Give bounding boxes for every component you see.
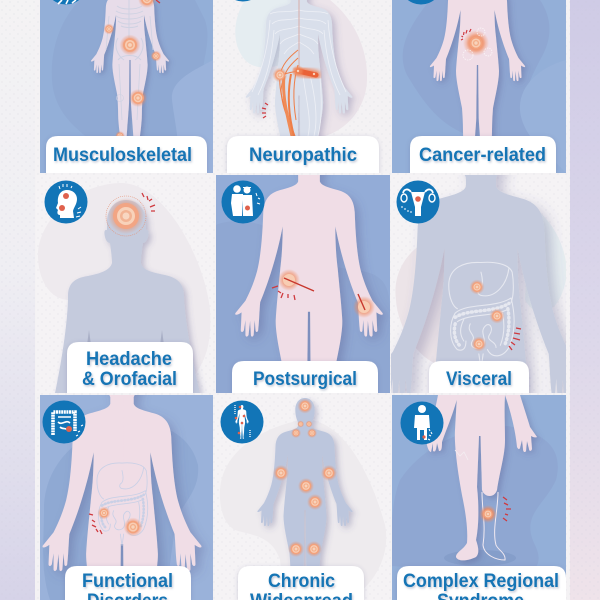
pain points <box>470 280 521 352</box>
icon: uterus <box>396 180 440 224</box>
body <box>235 175 386 361</box>
body with organs <box>42 395 205 575</box>
icon: neuropathic <box>235 0 251 2</box>
pain points <box>89 506 142 536</box>
icon: musculoskeletal <box>53 0 79 4</box>
panel: musculoskeletal <box>40 0 213 173</box>
label: Functional Disorders: Functional <box>82 571 173 592</box>
panel: headache and orofacial <box>44 180 204 393</box>
body with organs <box>391 175 566 393</box>
body with amputated leg <box>426 395 537 560</box>
label: Headache & Orofacial: & Orofacial <box>82 369 177 390</box>
icon: couple <box>222 180 264 224</box>
icon: intestine <box>42 400 86 444</box>
label: Chronic Widespread <box>238 566 364 600</box>
icon: person with leg pain <box>400 402 444 444</box>
icon: cancer-related <box>408 0 434 4</box>
body <box>258 398 356 566</box>
label: Postsurgical: Postsurgical <box>253 369 357 390</box>
panel: postsurgical <box>216 175 390 393</box>
body <box>430 0 527 136</box>
label: Musculoskeletal <box>46 136 207 173</box>
panel: chronic widespread <box>220 398 368 600</box>
label: Chronic Widespread: Chronic <box>268 571 335 592</box>
panel: cancer-related <box>392 0 566 186</box>
label: Visceral <box>429 361 529 393</box>
label: Complex Regional Syndrome: Complex Regional <box>403 571 559 592</box>
label: Headache & Orofacial <box>67 342 193 393</box>
label: Complex Regional Syndrome <box>397 566 566 600</box>
label: Functional Disorders <box>65 566 191 600</box>
pain points <box>273 398 337 557</box>
body with skeleton <box>91 0 170 136</box>
pain point <box>455 450 511 523</box>
panel: neuropathic <box>226 0 380 173</box>
label: Neuropathic: Neuropathic <box>249 145 357 166</box>
pain points <box>104 0 162 141</box>
body with nerves <box>246 0 356 136</box>
phantom leg outline <box>482 492 505 560</box>
panel: complex regional syndrome <box>391 395 566 600</box>
tumour and cells <box>461 28 492 60</box>
panel: visceral <box>391 175 566 393</box>
label: Postsurgical <box>232 361 378 393</box>
icon: head <box>44 180 88 224</box>
panel: functional disorders <box>40 395 213 600</box>
label: Musculoskeletal: Musculoskeletal <box>53 145 192 166</box>
label: Headache & Orofacial: Headache <box>86 349 172 370</box>
headache pain <box>106 193 155 236</box>
label: Visceral: Visceral <box>446 369 512 390</box>
head and shoulders <box>55 200 200 393</box>
nerves in pain <box>262 50 316 136</box>
surgical pain points <box>272 269 375 318</box>
icon: person <box>220 400 264 444</box>
label: Neuropathic <box>227 136 379 173</box>
label: Cancer-related: Cancer-related <box>419 145 546 166</box>
label: Cancer-related <box>410 136 556 173</box>
